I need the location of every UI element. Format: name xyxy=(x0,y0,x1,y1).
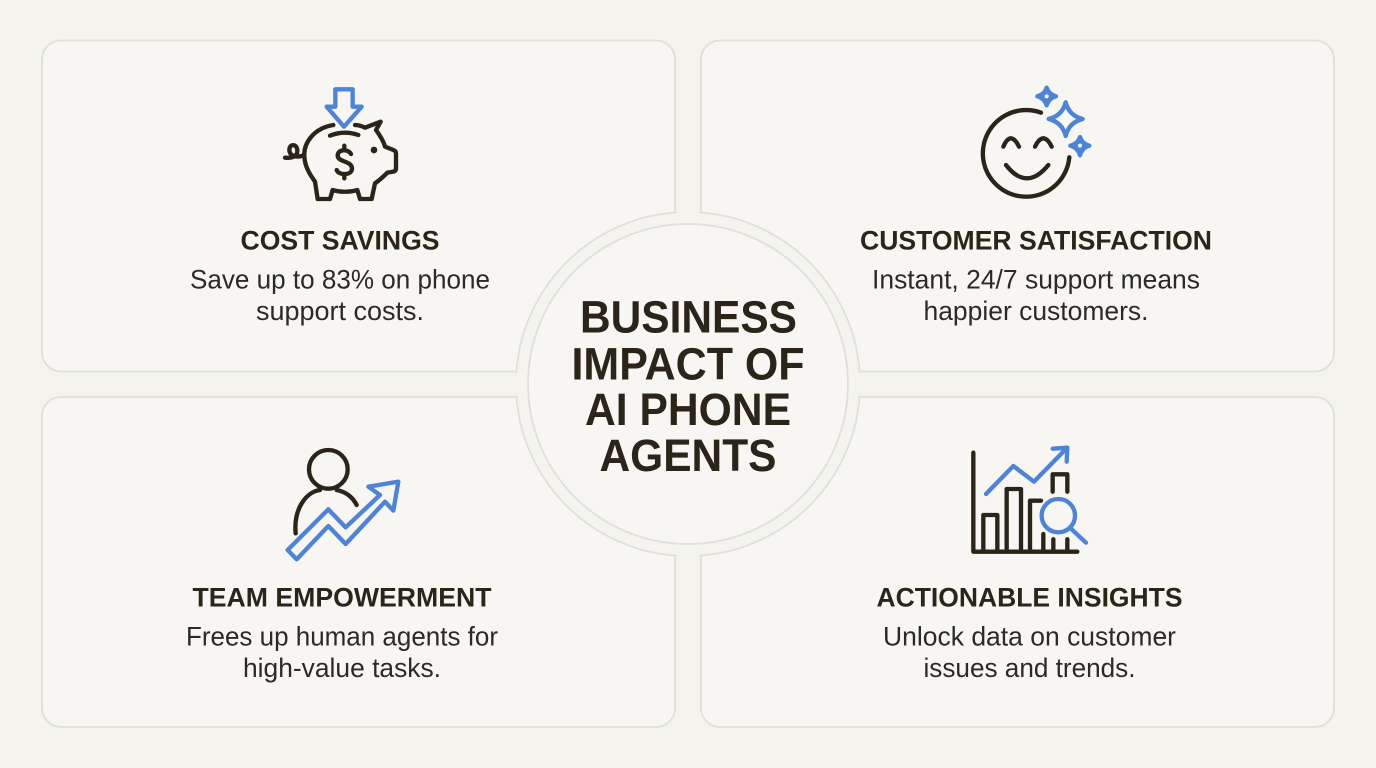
center circle with title xyxy=(528,224,848,544)
text: customer satisfaction description: Instant, 24/7 support means xyxy=(872,264,1200,294)
text: actionable insights description: issues and trends. xyxy=(924,653,1136,683)
panel: team empowerment xyxy=(42,397,675,727)
icon: smiling face with sparkles xyxy=(983,88,1089,197)
text: actionable insights description xyxy=(883,622,1176,683)
heading: cost savings: COST SAVINGS xyxy=(240,226,440,256)
panel: customer satisfaction xyxy=(701,40,1334,372)
title xyxy=(572,292,804,481)
icon: person with rising arrow xyxy=(288,450,398,559)
title: AI PHONE xyxy=(585,384,791,435)
heading: team empowerment: TEAM EMPOWERMENT xyxy=(192,582,492,612)
title: IMPACT OF xyxy=(572,338,804,390)
text: cost savings description: support costs. xyxy=(256,296,424,326)
text: actionable insights description: Unlock data on customer xyxy=(883,622,1176,652)
title: AGENTS xyxy=(600,430,776,481)
panel: cost savings xyxy=(42,40,675,372)
text: team empowerment description xyxy=(186,622,498,683)
text: cost savings description: Save up to 83% on phone xyxy=(190,264,490,294)
text: team empowerment description: high-value tasks. xyxy=(243,653,441,683)
text: customer satisfaction description: happier customers. xyxy=(924,296,1148,326)
panel: actionable insights xyxy=(701,397,1334,727)
icon: piggy bank with down arrow xyxy=(285,89,396,199)
heading: actionable insights: ACTIONABLE INSIGHTS xyxy=(876,582,1182,612)
outer ring xyxy=(516,212,860,556)
text: team empowerment description: Frees up human agents for xyxy=(186,622,498,652)
heading: customer satisfaction: CUSTOMER SATISFACTION xyxy=(860,226,1212,256)
icon: bar chart with magnifier xyxy=(973,448,1086,552)
title: BUSINESS xyxy=(580,292,797,342)
text: cost savings description xyxy=(190,264,490,326)
text: customer satisfaction description xyxy=(872,264,1200,326)
